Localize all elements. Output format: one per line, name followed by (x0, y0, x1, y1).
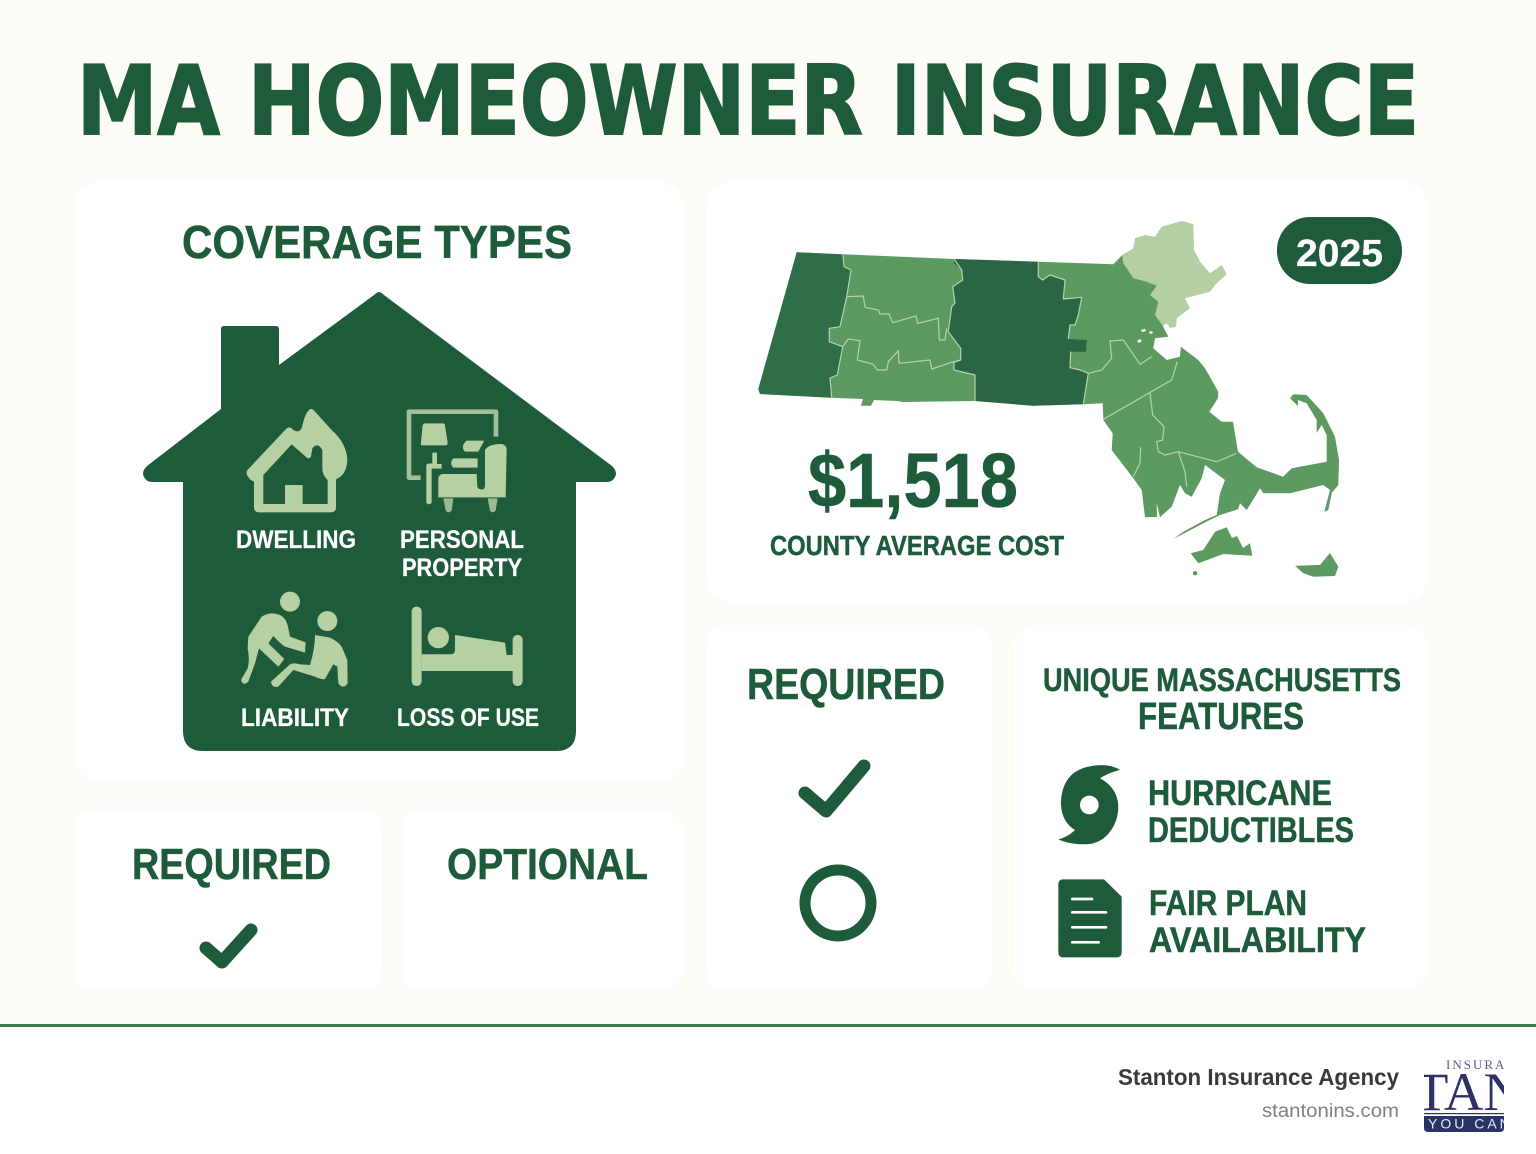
county borders (829, 255, 1237, 487)
label: loss of use: LOSS OF USE (397, 704, 539, 732)
footer: agency name: Stanton Insurance Agency (1118, 1064, 1399, 1090)
icon: document (1058, 879, 1122, 957)
heading: unique features (1043, 662, 1401, 738)
badge: 2025: 2025 (1296, 233, 1383, 275)
panel: optional (403, 810, 683, 990)
house illustration (143, 292, 616, 751)
heading: optional: OPTIONAL (447, 840, 648, 889)
icon: circle (805, 870, 871, 936)
panel: unique features (1014, 625, 1427, 990)
label: personal property: PERSONAL (400, 526, 524, 554)
label: personal property (400, 526, 524, 582)
heading: unique features: UNIQUE MASSACHUSETTS (1043, 662, 1401, 698)
heading: required: REQUIRED (747, 660, 945, 709)
badge: 2025 (1277, 217, 1402, 284)
icon: loss of use (412, 607, 523, 686)
island: Martha's Vineyard (1191, 527, 1252, 563)
feature: hurricane deductibles (1148, 774, 1354, 850)
footer: logo: TAN (1415, 1062, 1523, 1122)
panel: required and optional symbols (706, 625, 992, 990)
feature: hurricane deductibles: DEDUCTIBLES (1148, 811, 1354, 850)
icon: hurricane (1058, 765, 1120, 844)
heading: unique features: FEATURES (1138, 696, 1304, 738)
icon: check (206, 930, 251, 962)
map of Massachusetts (758, 221, 1339, 577)
label: liability: LIABILITY (241, 704, 349, 732)
heading: required: REQUIRED (132, 840, 331, 889)
stat label: COUNTY AVERAGE COST (770, 530, 1064, 561)
icon: liability (241, 592, 348, 687)
feature: hurricane deductibles: HURRICANE (1148, 774, 1332, 813)
label: personal property: PROPERTY (402, 554, 522, 582)
icon: dwelling (247, 409, 347, 512)
footer: logo: YOU CAN (1428, 1116, 1513, 1132)
panel: coverage types (75, 182, 683, 782)
label: dwelling: DWELLING (236, 526, 356, 554)
county: Berkshire (758, 252, 851, 398)
icon: personal property (409, 412, 507, 512)
icon: check (805, 766, 864, 811)
feature: fair plan availability: FAIR PLAN (1149, 884, 1307, 923)
footer (0, 1024, 1536, 1154)
harbor islands (1137, 329, 1153, 343)
panel: required (75, 810, 382, 990)
county: Worcester (948, 259, 1088, 406)
island: Nantucket (1193, 553, 1338, 577)
feature: fair plan availability: AVAILABILITY (1149, 921, 1366, 960)
footer: logo: INSURA (1446, 1057, 1506, 1072)
county: Essex (1122, 221, 1227, 328)
feature: fair plan availability (1149, 884, 1366, 960)
footer: website: stantonins.com (1262, 1101, 1399, 1122)
panel: county map (706, 182, 1427, 602)
heading: coverage types: COVERAGE TYPES (182, 216, 572, 268)
stat: average cost: $1,518 (808, 438, 1018, 524)
